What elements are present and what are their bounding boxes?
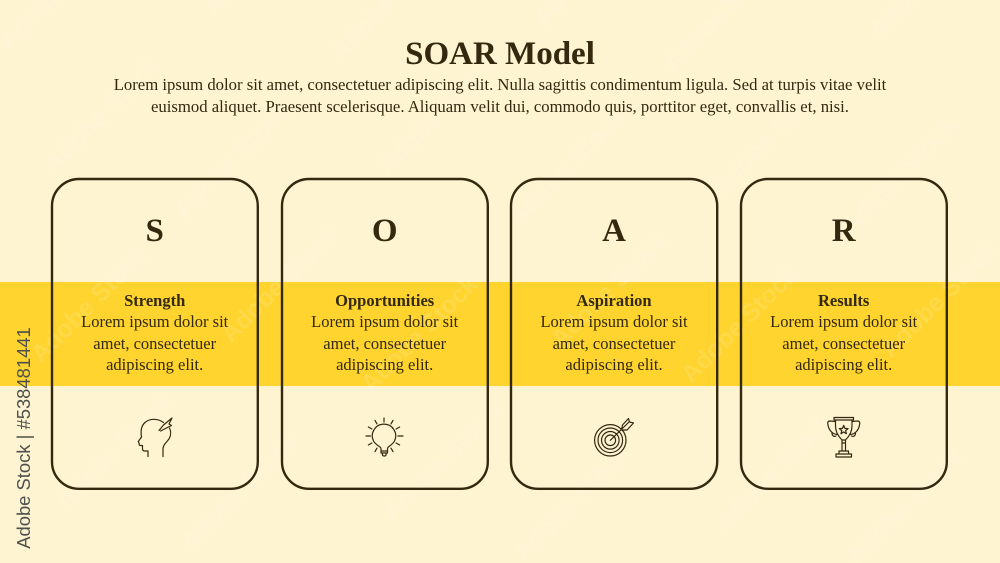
text: Strength: [81, 290, 228, 374]
watermark pattern: Adobe Stock: [372, 52, 500, 180]
text: Opportunities: amet, consectetuer: [323, 334, 446, 352]
letter O: O: [372, 213, 398, 249]
yellow band: [0, 282, 1000, 386]
text: Aspiration: adipiscing elit.: [565, 355, 663, 374]
watermark pattern: Adobe Stock: [168, 96, 296, 224]
text: Aspiration: amet, consectetuer: [553, 334, 675, 352]
watermark pattern: Adobe Stock: [710, 408, 838, 536]
text: Aspiration: Lorem ipsum dolor sit: [540, 312, 688, 331]
panel: Aspiration card outline: [510, 178, 718, 490]
letter R: R: [832, 213, 856, 249]
watermark pattern: Adobe Stock: [508, 438, 636, 563]
text: Strength: adipiscing elit.: [106, 355, 203, 374]
watermark pattern: Adobe Stock: [875, 235, 1000, 363]
panel: Results card outline: [740, 178, 948, 490]
text: Opportunities: adipiscing elit.: [336, 355, 433, 374]
text: Results: adipiscing elit.: [795, 355, 892, 374]
watermark pattern: Adobe Stock: [50, 387, 178, 515]
text: Opportunities: Lorem ipsum dolor sit: [311, 312, 458, 331]
text: Strength: Strength: [124, 290, 185, 310]
text: Strength: Lorem ipsum dolor sit: [81, 312, 228, 331]
watermark pattern: Adobe Stock: [502, 103, 630, 231]
intro text: Lorem ipsum dolor sit amet, consectetuer adipiscing elit. Nulla sagittis condimentum ligula. Sed at turpis vitae velit: [114, 75, 886, 94]
title: SOAR Model: [405, 36, 595, 72]
watermark pattern: Adobe Stock: [215, 220, 343, 348]
watermark pattern: Adobe Stock: [545, 225, 673, 353]
text: Results: amet, consectetuer: [782, 334, 905, 352]
intro text: [114, 75, 886, 116]
watermark pattern: Adobe Stock: [38, 50, 166, 178]
text: Strength: amet, consectetuer: [93, 334, 216, 352]
panel: Opportunities card outline: [280, 178, 489, 490]
letter A: A: [602, 213, 626, 249]
text: Aspiration: Aspiration: [576, 290, 652, 310]
watermark pattern: Adobe Stock: [355, 270, 483, 398]
letter S: S: [146, 213, 164, 249]
text: Aspiration: [540, 290, 688, 374]
watermark pattern: Adobe Stock: [835, 111, 963, 239]
watermark pattern: Adobe Stock: [25, 240, 153, 368]
watermark pattern: Adobe Stock: [175, 427, 303, 555]
watermark label: Adobe Stock | #538481441: [12, 327, 34, 549]
text: Results: [770, 290, 918, 374]
intro text: euismod aliquet. Praesent scelerisque. Aliquam velit dui, commodo quis, porttitor eget, convallis et, nisi.: [151, 96, 849, 116]
panel: Strength card outline: [50, 178, 259, 490]
text: Opportunities: Opportunities: [335, 290, 434, 310]
text: Results: Lorem ipsum dolor sit: [770, 312, 917, 331]
text: Results: Results: [818, 290, 869, 310]
text: Opportunities: [311, 290, 458, 374]
watermark pattern: Adobe Stock: [377, 398, 505, 526]
watermark pattern: Adobe Stock: [675, 260, 803, 388]
watermark pattern: Adobe Stock: [705, 73, 833, 201]
